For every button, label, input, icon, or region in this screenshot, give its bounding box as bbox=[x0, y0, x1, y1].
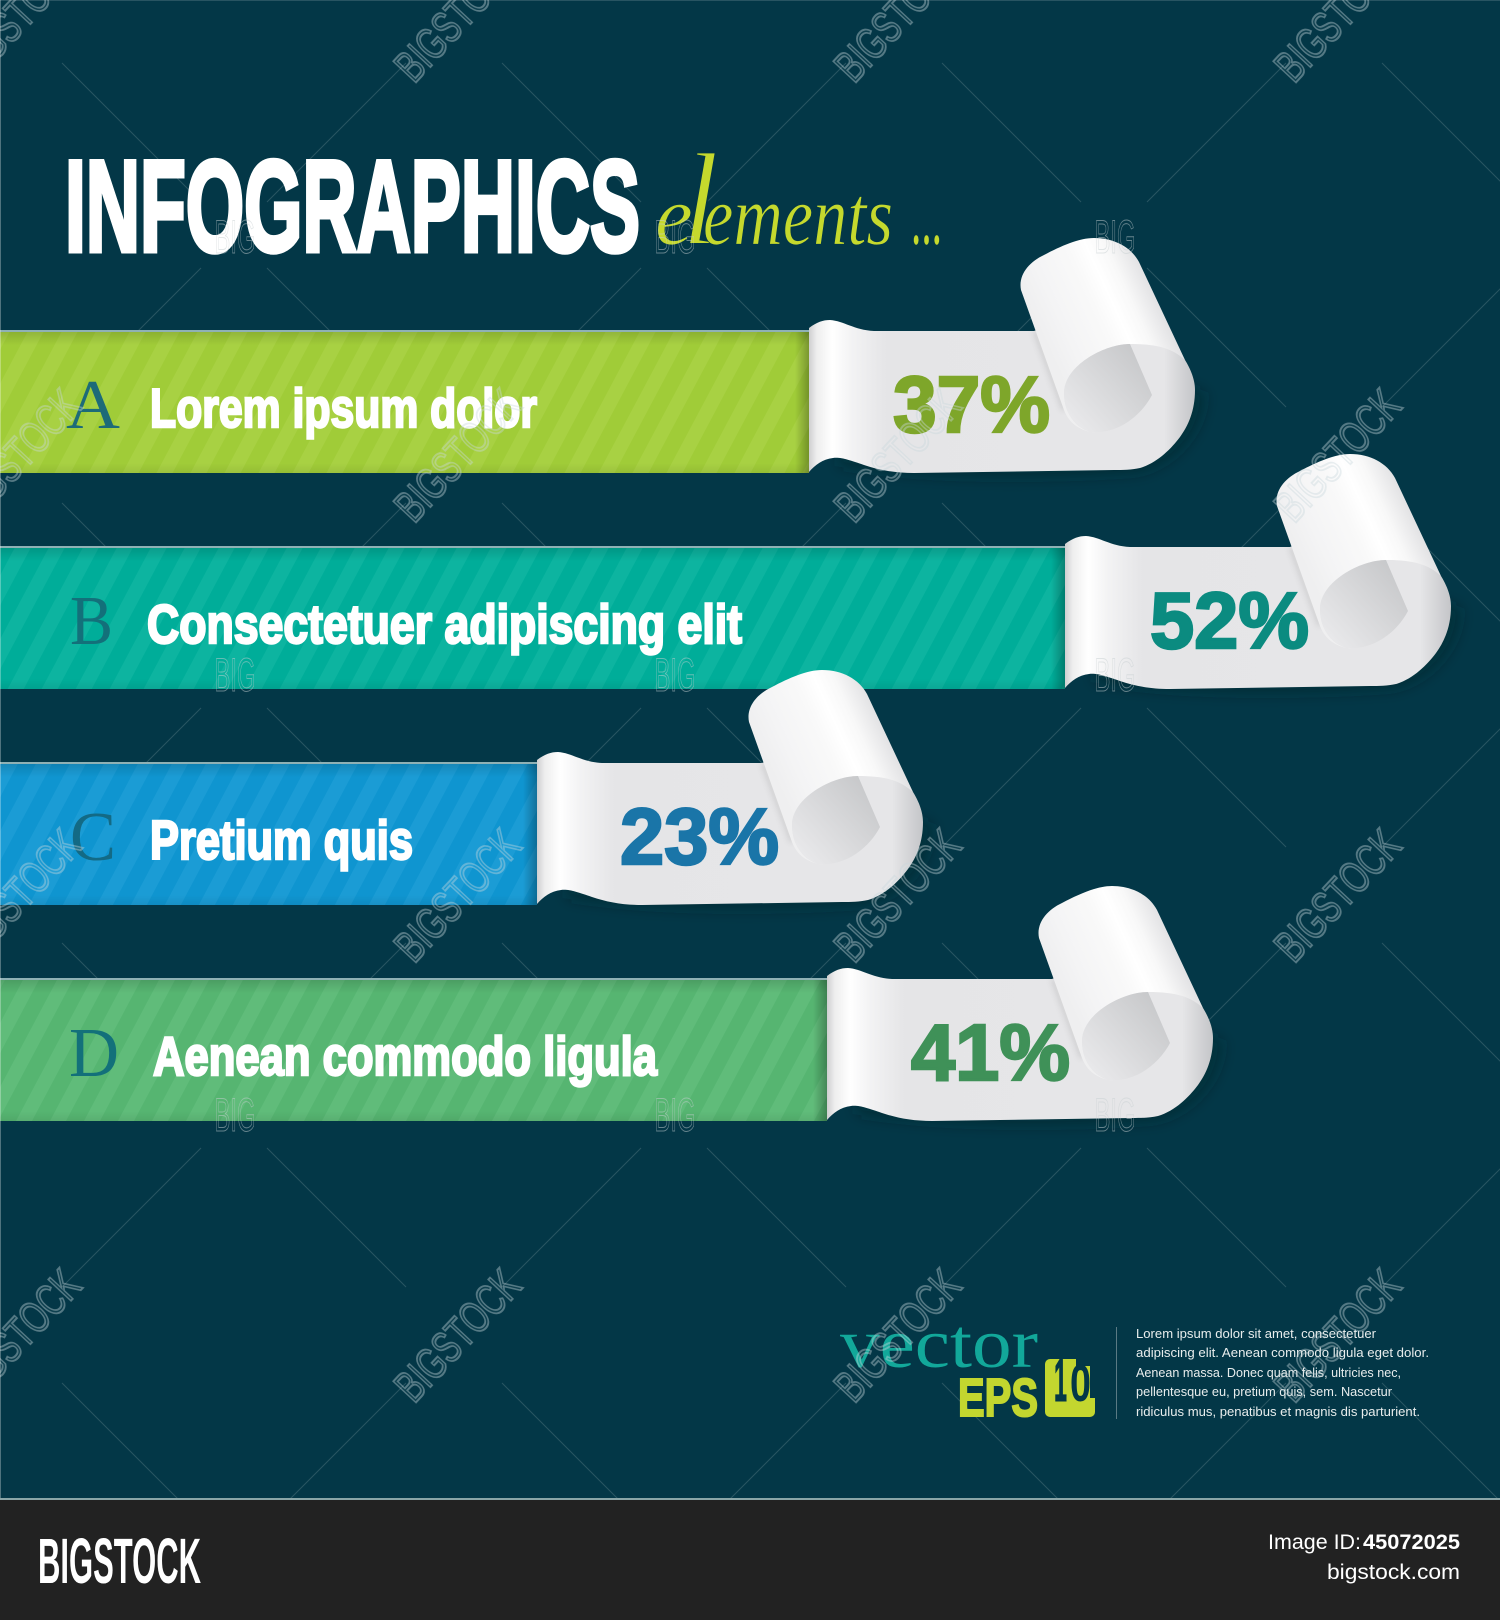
bar D: 41% bbox=[0, 886, 1223, 1125]
description text bbox=[1136, 1327, 1429, 1419]
title: INFOGRAPHICS: INFOGRAPHICS bbox=[65, 133, 640, 279]
footer url: bigstock.com bbox=[1327, 1561, 1460, 1584]
footer bar bbox=[0, 1498, 1500, 1620]
bar A percentage: 37% bbox=[893, 360, 1050, 449]
10 block: 0 bbox=[1070, 1355, 1091, 1413]
bar B: 52% bbox=[0, 454, 1461, 693]
bar A label: Lorem ipsum dolor bbox=[150, 377, 537, 439]
bar C: 23% bbox=[0, 670, 933, 909]
BIGSTOCK watermarks: BIGSTOCK bbox=[384, 1259, 531, 1411]
bar C label: Pretium quis bbox=[150, 809, 413, 871]
EPS wordmark: EPS bbox=[958, 1368, 1038, 1428]
BIG watermarks: BIG bbox=[654, 648, 696, 701]
10 block: 1 bbox=[1054, 1347, 1067, 1414]
description text: Lorem ipsum dolor sit amet, consectetuer bbox=[1136, 1327, 1376, 1341]
bar D letter: D bbox=[69, 1015, 119, 1092]
BIG watermarks: BIG bbox=[214, 648, 256, 701]
BIGSTOCK watermarks: BIGSTOCK bbox=[384, 819, 531, 971]
title: elements script: l bbox=[682, 126, 719, 273]
bar A band bbox=[0, 330, 809, 473]
bar C band bbox=[0, 762, 537, 905]
description text: adipiscing elit. Aenean commodo ligula eget dolor. bbox=[1136, 1346, 1429, 1360]
image id label: Image ID: bbox=[1268, 1531, 1361, 1554]
title bbox=[65, 126, 943, 279]
BIGSTOCK watermarks: BIGSTOCK bbox=[824, 819, 971, 971]
bar D label: Aenean commodo ligula bbox=[153, 1025, 657, 1087]
BIG watermarks: BIG bbox=[1094, 1088, 1136, 1141]
BIGSTOCK watermarks: BIGSTOCK bbox=[1264, 1259, 1411, 1411]
BIG watermarks bbox=[214, 210, 1136, 1141]
bar D band bbox=[0, 978, 827, 1121]
BIGSTOCK watermarks: BIGSTOCK bbox=[824, 379, 971, 531]
bar B paper scroll bbox=[1065, 454, 1461, 693]
BIGSTOCK watermarks: BIGSTOCK bbox=[1264, 819, 1411, 971]
BIGSTOCK watermarks: BIGSTOCK bbox=[824, 1259, 971, 1411]
bar B percentage: 52% bbox=[1150, 576, 1309, 665]
bar A: 37% bbox=[0, 238, 1205, 477]
text: ... bbox=[912, 169, 943, 263]
title: elements script: ements bbox=[703, 169, 893, 263]
BIGSTOCK watermarks: BIGSTOCK bbox=[384, 379, 531, 531]
bar A letter: A bbox=[66, 367, 120, 444]
BIG watermarks: BIG bbox=[214, 1088, 256, 1141]
BIG watermarks: BIG bbox=[1094, 210, 1136, 263]
title: elements script: e bbox=[655, 169, 693, 263]
bar D paper scroll bbox=[827, 886, 1223, 1125]
BIGSTOCK watermarks: BIGSTOCK bbox=[1264, 379, 1411, 531]
bar C paper scroll bbox=[537, 670, 933, 909]
vector EPS 10 badge bbox=[840, 1306, 1096, 1428]
bar B letter: B bbox=[70, 583, 113, 660]
BIG watermarks: BIG bbox=[654, 1088, 696, 1141]
BIG watermarks: BIG bbox=[1094, 648, 1136, 701]
vector wordmark: vector bbox=[840, 1306, 1038, 1383]
footer bar: BIGSTOCK bbox=[38, 1525, 201, 1597]
image id number: 45072025 bbox=[1363, 1531, 1460, 1554]
description text: Aenean massa. Donec quam felis, ultricies nec, bbox=[1136, 1366, 1401, 1380]
bar C percentage: 23% bbox=[620, 792, 779, 881]
10 block bbox=[1045, 1347, 1096, 1417]
BIG watermarks: BIG bbox=[214, 210, 256, 263]
description text: ridiculus mus, penatibus et magnis dis parturient. bbox=[1136, 1405, 1420, 1419]
BIG watermarks: BIG bbox=[654, 210, 696, 263]
bar A paper scroll bbox=[809, 238, 1205, 477]
title: elements script bbox=[655, 126, 943, 273]
bar C letter: C bbox=[70, 799, 116, 876]
description text: pellentesque eu, pretium quis, sem. Nascetur bbox=[1136, 1385, 1392, 1399]
bar B band bbox=[0, 546, 1065, 689]
bar D percentage: 41% bbox=[911, 1008, 1070, 1097]
bar B label: Consectetuer adipiscing elit bbox=[147, 593, 742, 655]
